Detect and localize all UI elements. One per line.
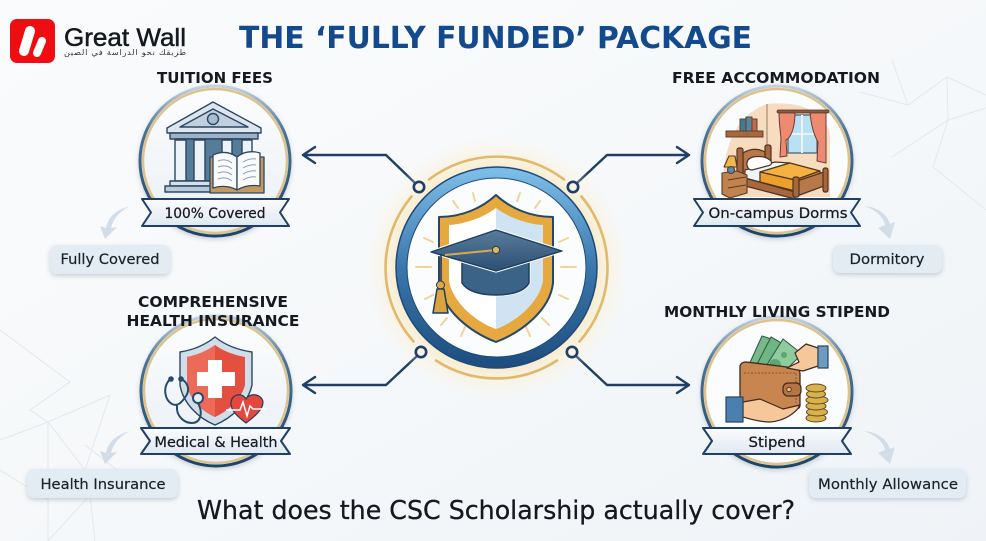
coins xyxy=(806,384,828,422)
heading: comprehensive health insurance: HEALTH INSURANCE xyxy=(126,312,300,330)
pill: monthly allowance xyxy=(809,469,966,498)
nightstand and lamp xyxy=(722,156,747,198)
heading: comprehensive health insurance xyxy=(126,293,300,330)
pill: fully covered: Fully Covered xyxy=(60,252,160,268)
panel: comprehensive health insurance xyxy=(27,293,300,498)
graduation cap xyxy=(431,230,562,313)
ribbon: stipend xyxy=(703,428,851,454)
room backdrop xyxy=(723,103,830,197)
arrow: to fully covered xyxy=(100,206,130,239)
window xyxy=(777,110,829,163)
logo: Great Wall xyxy=(10,19,186,63)
shelf and books xyxy=(726,117,763,137)
heading: monthly living stipend: MONTHLY LIVING STIPEND xyxy=(664,303,890,321)
ribbon: medical & health: Medical & Health xyxy=(154,435,278,451)
central emblem xyxy=(364,136,628,400)
hand giving money xyxy=(787,344,818,371)
bed xyxy=(737,145,828,199)
emblem glow xyxy=(364,136,628,400)
title: THE ‘FULLY FUNDED’ PACKAGE xyxy=(239,21,752,56)
gold arcs xyxy=(386,157,607,378)
arrow: to dormitory xyxy=(865,206,895,239)
panel: tuition fees xyxy=(50,69,290,274)
logo mark xyxy=(10,19,55,63)
wallet xyxy=(740,362,800,409)
heading: comprehensive health insurance: COMPREHENSIVE xyxy=(138,293,288,311)
ribbon: on-campus dorms: On-campus Dorms xyxy=(708,206,848,222)
icon: heart with pulse xyxy=(226,395,267,423)
medallion xyxy=(140,86,290,236)
panel: free accommodation xyxy=(672,69,942,273)
banknotes xyxy=(748,336,802,374)
ribbon: 100% covered xyxy=(142,199,289,226)
logo wordmark: Great Wall xyxy=(64,24,186,52)
medallion xyxy=(141,316,291,466)
ribbon: on-campus dorms xyxy=(694,199,860,226)
heading: free accommodation: FREE ACCOMMODATION xyxy=(672,69,880,87)
connectors and arrows xyxy=(303,147,689,393)
ribbon: stipend: Stipend xyxy=(748,435,806,451)
pill: monthly allowance: Monthly Allowance xyxy=(818,477,958,493)
medallion xyxy=(702,86,852,236)
connector nodes xyxy=(414,182,578,357)
icon: open book xyxy=(210,152,264,193)
pill: fully covered xyxy=(50,245,170,274)
ribbon: medical & health xyxy=(141,428,290,454)
pill: dormitory xyxy=(833,245,942,273)
panel: monthly living stipend xyxy=(664,303,966,498)
icon: stethoscope xyxy=(165,377,203,423)
arrow: to monthly allowance xyxy=(864,431,895,464)
medallion xyxy=(702,317,852,467)
ribbon: 100% covered: 100% Covered xyxy=(164,206,266,222)
icon: university building xyxy=(165,102,261,192)
bottom question: What does the CSC Scholarship actually cover? xyxy=(197,496,795,526)
icon: medical shield xyxy=(180,337,252,425)
rays xyxy=(416,193,576,336)
pill: dormitory: Dormitory xyxy=(850,252,924,268)
arrow: to health insurance xyxy=(100,431,130,464)
hand receiving xyxy=(743,399,800,422)
pill: health insurance xyxy=(27,469,178,498)
logo arabic tagline: طريقك نحو الدراسة في الصين xyxy=(64,48,186,57)
heading: tuition fees: TUITION FEES xyxy=(157,69,273,87)
main ring xyxy=(402,172,592,362)
icon: wallet and money xyxy=(726,336,828,422)
icon: dorm room xyxy=(722,103,830,199)
shield xyxy=(439,195,553,342)
pill: health insurance: Health Insurance xyxy=(40,477,166,493)
